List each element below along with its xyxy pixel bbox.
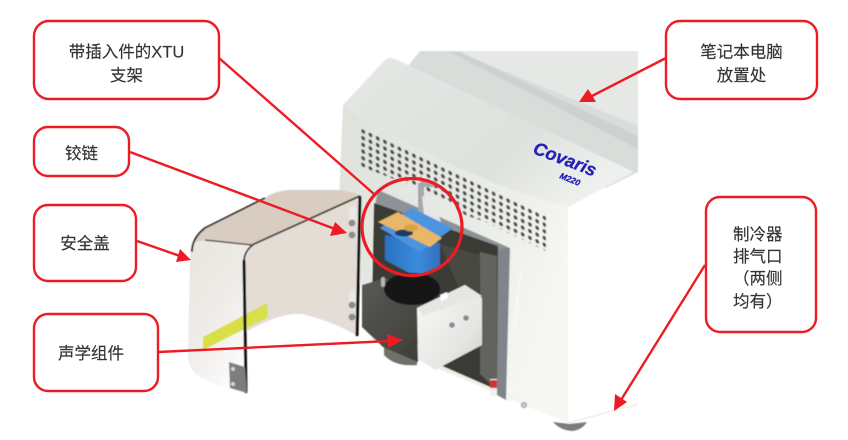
hinges bbox=[349, 207, 356, 320]
XTU holder: blue block bbox=[378, 208, 453, 277]
device foot bbox=[553, 422, 587, 431]
arrow: XTU callout to circle bbox=[219, 58, 374, 194]
window frame bbox=[372, 190, 510, 400]
callout: acoustic assembly bbox=[34, 314, 158, 391]
callout: safety cover bbox=[34, 205, 136, 281]
vent holes bbox=[360, 127, 546, 251]
callout: chiller exhaust: 均有） bbox=[733, 292, 782, 311]
device: Covaris M220 instrument bbox=[188, 51, 638, 431]
callout: acoustic assembly: 声学组件 bbox=[58, 344, 124, 363]
sample holder post bbox=[418, 181, 441, 228]
device front face bbox=[339, 105, 568, 423]
callout: laptop placement: 放置处 bbox=[717, 66, 766, 85]
white transducer box bbox=[417, 285, 482, 370]
callout: laptop placement bbox=[666, 21, 817, 99]
red highlight circle around XTU holder bbox=[362, 178, 462, 276]
acoustic assembly bbox=[362, 273, 440, 365]
device top cap bbox=[343, 58, 634, 207]
callout: XTU holder: 带插入件的XTU bbox=[69, 42, 184, 62]
logo: Covaris M220: M220 bbox=[558, 171, 582, 188]
logo: Covaris M220: Covaris bbox=[531, 138, 599, 180]
arrow: hinge bbox=[130, 152, 347, 236]
callout: chiller exhaust: （两侧 bbox=[733, 269, 782, 288]
arrow: acoustic assembly bbox=[158, 334, 403, 352]
callout: safety cover: 安全盖 bbox=[60, 234, 110, 253]
callout: chiller exhaust: 制冷器 bbox=[733, 225, 783, 244]
arrow: safety cover bbox=[137, 241, 191, 262]
callout: XTU holder bbox=[34, 21, 219, 99]
device rear top: laptop platform bbox=[408, 51, 638, 190]
safety cover bbox=[188, 190, 361, 393]
callout: hinge bbox=[34, 127, 129, 176]
arrow: chiller exhaust bbox=[614, 265, 705, 411]
callout: laptop placement: 笔记本电脑 bbox=[700, 42, 783, 62]
device right side panel bbox=[568, 172, 638, 423]
callout: chiller exhaust bbox=[706, 197, 816, 332]
callout: chiller exhaust: 排气口 bbox=[733, 247, 782, 266]
arrow: laptop placement bbox=[579, 58, 666, 102]
device bottom edge line bbox=[568, 404, 638, 423]
callout: hinge: 铰链 bbox=[65, 144, 98, 163]
callout: XTU holder: 支架 bbox=[110, 66, 143, 85]
